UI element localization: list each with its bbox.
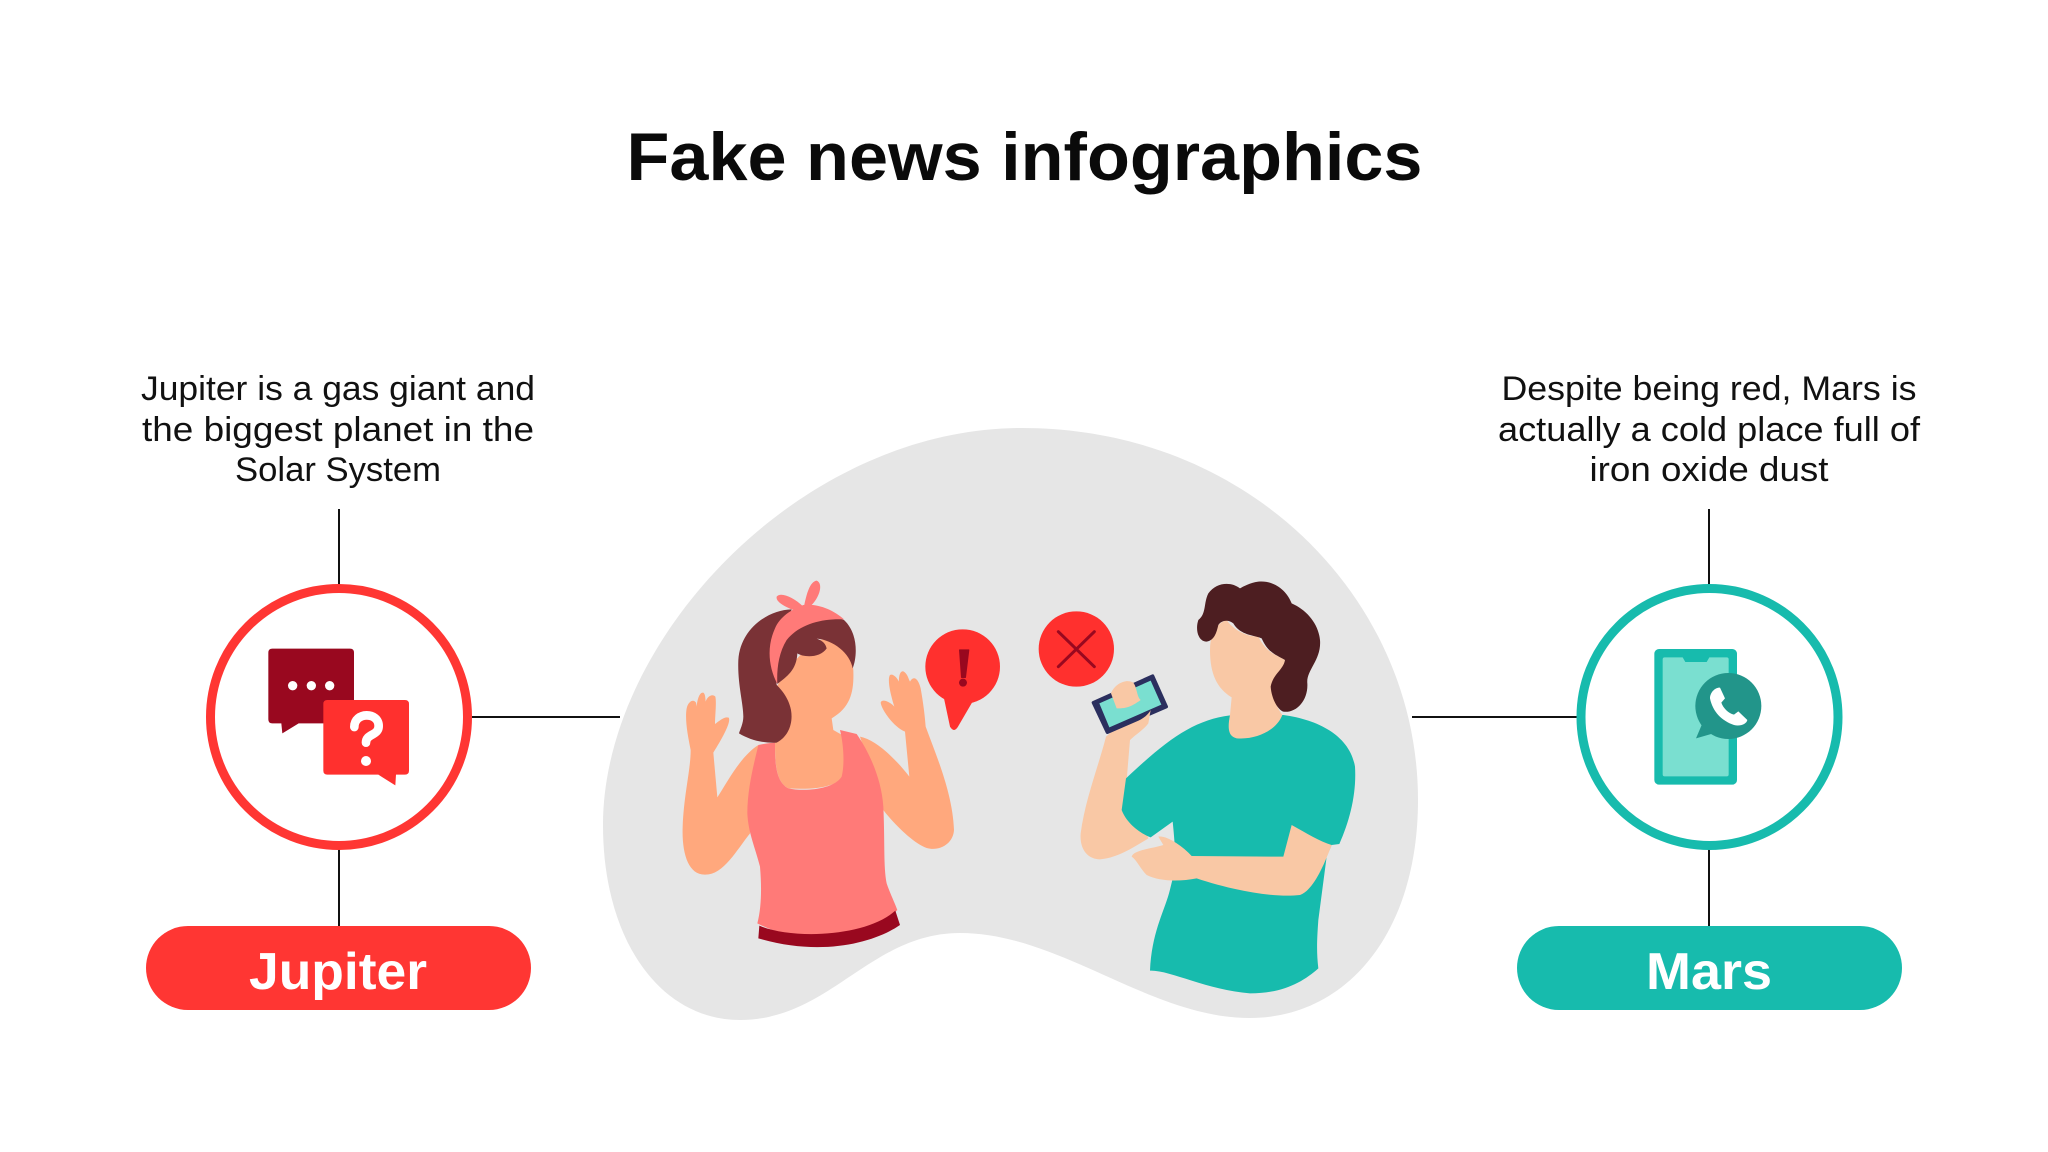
text block: Mars description: Despite being red, Mars is xyxy=(1502,370,1916,408)
text block: Mars description xyxy=(1498,370,1921,489)
text block: Jupiter description: Jupiter is a gas giant and xyxy=(141,370,535,408)
icon: chat bubbles with question mark xyxy=(268,649,409,785)
label pill: Jupiter xyxy=(146,926,531,1010)
label pill: Mars xyxy=(1517,926,1902,1010)
panel: Jupiter circle xyxy=(210,588,468,846)
icon: phone in hand xyxy=(1093,676,1166,740)
title: Fake news infographics xyxy=(626,119,1422,195)
text block: Mars description: actually a cold place full of xyxy=(1498,411,1921,449)
icon: red cross circle xyxy=(1039,611,1114,687)
panel: grey blob background xyxy=(603,428,1418,1020)
text block: Jupiter description: Solar System xyxy=(235,451,441,489)
text block: Jupiter description: the biggest planet in the xyxy=(142,411,534,449)
illustration: man with phone xyxy=(1039,581,1355,993)
icon: phone with call bubble xyxy=(1654,649,1761,785)
panel: Mars circle xyxy=(1581,588,1838,846)
icon: alert speech bubble xyxy=(925,629,1000,730)
text block: Mars description: iron oxide dust xyxy=(1590,451,1829,489)
illustration: woman with alert bubble xyxy=(683,581,1000,947)
label pill: Jupiter: Jupiter xyxy=(249,943,427,1001)
text block: Jupiter description xyxy=(141,370,535,489)
connector lines xyxy=(339,509,1709,926)
label pill: Mars: Mars xyxy=(1646,943,1772,1001)
